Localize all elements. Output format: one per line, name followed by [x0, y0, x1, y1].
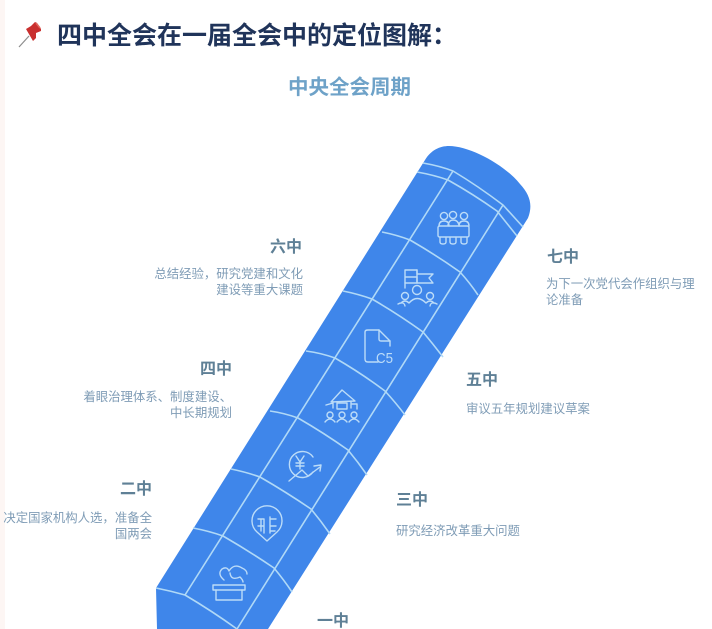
icon: C5 document: C5: [376, 350, 393, 367]
icon: people at a table: [438, 211, 469, 244]
label: 二中: 决定国家机构人选，准备全: [3, 510, 153, 525]
label: 七中: 为下一次党代会作组织与理: [546, 276, 695, 291]
icon: C5 document: [365, 330, 393, 367]
title: 四中全会在一届全会中的定位图解：: [57, 21, 457, 50]
label: 七中: [546, 248, 695, 307]
label: 三中: 研究经济改革重大问题: [396, 523, 520, 538]
pencil body: [156, 146, 530, 629]
label: 三中: [396, 491, 520, 538]
icon: red pushpin: [19, 22, 41, 47]
pencil diagram: [156, 146, 530, 629]
label: 四中: [83, 360, 232, 420]
label: 六中: 总结经验，研究党建和文化: [154, 266, 303, 281]
icon: house and people: [325, 390, 359, 422]
label: 二中: [3, 480, 153, 541]
label: 六中: 建设等重大课题: [216, 282, 303, 297]
icon: yuan and growth arrow: [289, 452, 321, 481]
label: 六中: 六中: [270, 238, 302, 256]
label: 五中: 审议五年规划建议草案: [466, 401, 591, 416]
label: 四中: 中长期规划: [170, 405, 232, 420]
icon: location pin with grid: [252, 506, 282, 541]
label: 四中: 着眼治理体系、制度建设、: [83, 389, 232, 404]
label: 二中: 二中: [120, 480, 152, 498]
label: 七中: 七中: [547, 248, 579, 266]
pencil grid lines: [156, 163, 523, 629]
icon: box with torn paper: [213, 566, 247, 600]
subtitle: central plenum cycle: 中央全会周期: [288, 75, 411, 99]
label: 四中: 四中: [200, 360, 232, 378]
label: 五中: [466, 371, 591, 416]
label: 二中: 国两会: [115, 527, 152, 541]
icon: flag and team: [398, 270, 437, 306]
label: 五中: 五中: [466, 371, 498, 389]
label: 七中: 论准备: [546, 293, 584, 307]
label: 六中: [154, 238, 303, 297]
label: 三中: 三中: [396, 491, 428, 509]
